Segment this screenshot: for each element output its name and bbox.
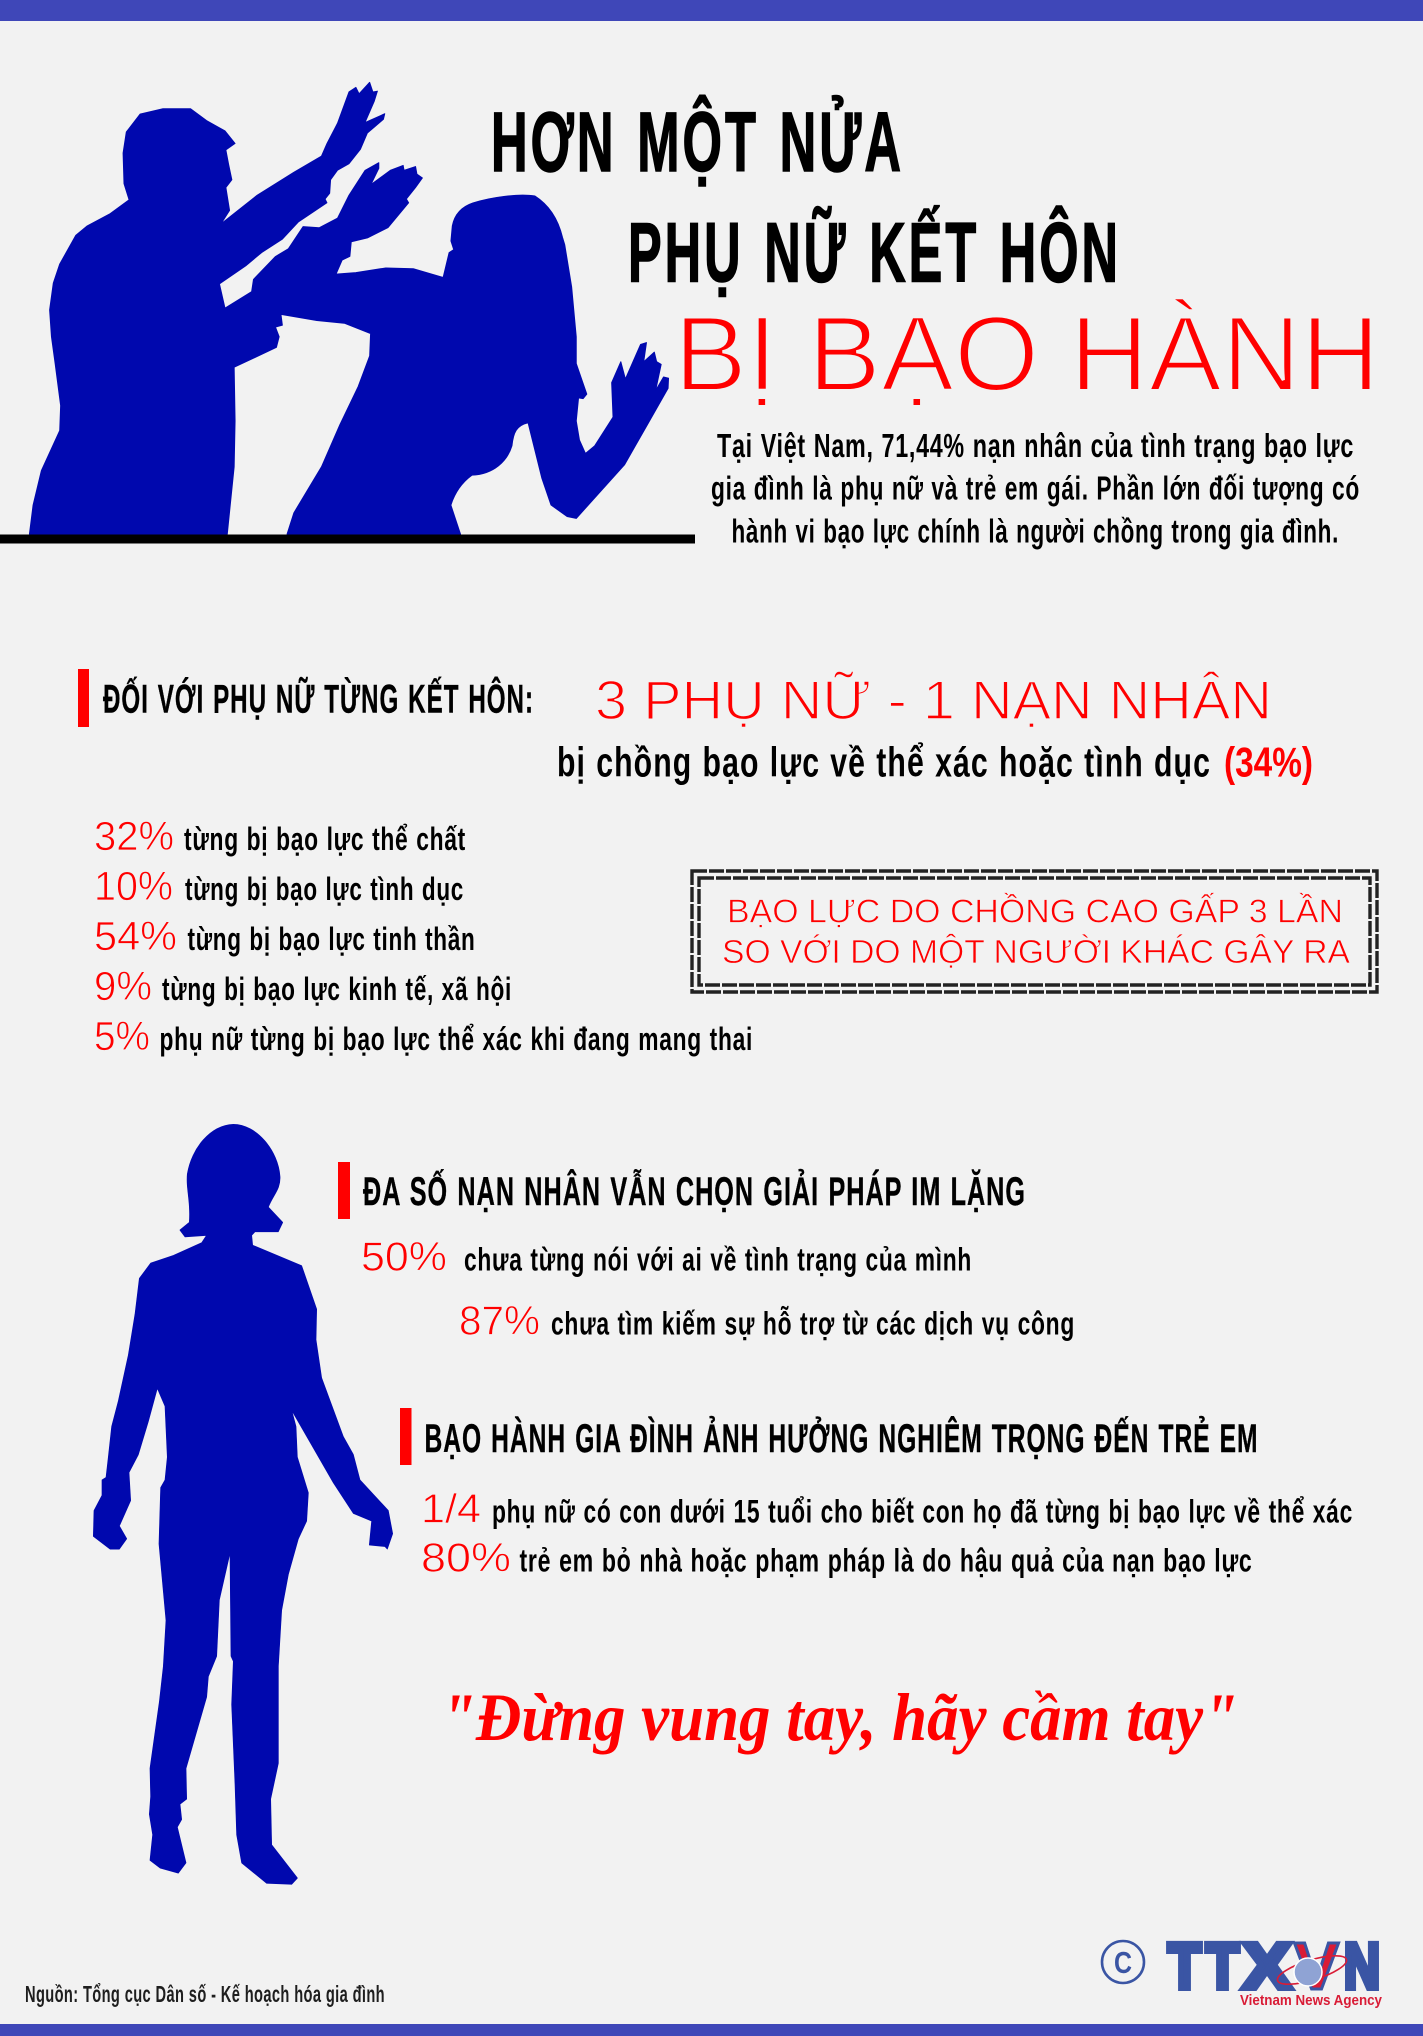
stat: 32%: từng bị bạo lực thể chất	[184, 821, 466, 857]
stat: 32%: 32%	[94, 813, 174, 859]
title: BỊ BẠO HÀNH	[674, 294, 1380, 414]
stat: 54%: 54%	[94, 913, 177, 959]
logo: TTXVN	[1102, 1929, 1383, 2009]
section marker	[78, 669, 89, 727]
callout: dashed box	[692, 871, 1377, 992]
logo wordmark: N	[1344, 1930, 1380, 2002]
slogan: "Đừng vung tay, hãy cầm tay"	[441, 1679, 1238, 1755]
logo wordmark: T	[1168, 1930, 1201, 2002]
stat: 10%: từng bị bạo lực tình dục	[185, 871, 464, 907]
stat: 5%	[94, 1013, 753, 1059]
stat: 9%: 9%	[94, 963, 152, 1009]
illustration: standing woman silhouette	[93, 1124, 393, 1884]
stat: 32%	[94, 813, 466, 859]
icon: copyright: C	[1114, 1945, 1132, 1980]
section marker	[338, 1162, 350, 1219]
logo wordmark	[1168, 1929, 1380, 2004]
logo tagline: Vietnam News Agency	[1240, 1992, 1383, 2009]
callout: dashed box: SO VỚI DO MỘT NGƯỜI KHÁC GÂY RA	[722, 933, 1350, 970]
icon: copyright	[1102, 1941, 1144, 1983]
stat: 50%: chưa từng nói với ai về tình trạng của mình	[464, 1242, 972, 1278]
logo wordmark: V	[1294, 1929, 1339, 2004]
section heading: ĐA SỐ NẠN NHÂN VẪN CHỌN GIẢI PHÁP IM LẶNG	[363, 1168, 1026, 1214]
stat: 9%	[94, 963, 512, 1009]
logo wordmark: T	[1206, 1930, 1239, 2002]
stat: 87%: 87%	[459, 1298, 540, 1344]
logo wordmark: X	[1243, 1930, 1291, 2002]
section heading: ĐỐI VỚI PHỤ NỮ TỪNG KẾT HÔN:	[103, 676, 534, 722]
headline stat: 3 PHỤ NỮ - 1 NẠN NHÂN	[595, 669, 1272, 731]
stat: 50%	[361, 1234, 972, 1280]
stat: 34%: (34%)	[1224, 738, 1313, 786]
icon: globe	[1275, 1950, 1349, 1990]
title	[491, 95, 1380, 414]
stat: 50%: 50%	[361, 1234, 447, 1280]
stat: 54%: từng bị bạo lực tinh thần	[188, 921, 476, 957]
stat: 1/4	[421, 1486, 1353, 1532]
section: silence	[338, 1162, 1075, 1344]
list of violence types	[94, 813, 753, 1059]
stat: 54%	[94, 913, 476, 959]
section: married women	[78, 669, 1313, 786]
intro paragraph	[711, 427, 1360, 550]
stat: 5%: phụ nữ từng bị bạo lực thể xác khi đang mang thai	[160, 1021, 753, 1057]
source: Nguồn: Tổng cục Dân số - Kế hoạch hóa gia đình	[25, 1981, 385, 2007]
illustration: man attacking woman silhouette	[0, 82, 695, 543]
stat: 5%: 5%	[94, 1013, 150, 1059]
stat: 80%: 80%	[421, 1534, 511, 1580]
title: HƠN MỘT NỬA	[491, 95, 904, 189]
stat: 10%: 10%	[94, 863, 173, 909]
stat: 87%	[459, 1298, 1075, 1344]
stat: 10%	[94, 863, 464, 909]
section marker	[400, 1408, 412, 1465]
stat: 9%: từng bị bạo lực kinh tế, xã hội	[162, 971, 512, 1007]
stat: 87%: chưa tìm kiếm sự hỗ trợ từ các dịch vụ công	[551, 1306, 1075, 1342]
top band	[0, 0, 1423, 21]
callout: dashed box: BẠO LỰC DO CHỒNG CAO GẤP 3 LẦN	[727, 892, 1343, 930]
section: children	[400, 1408, 1353, 1580]
stat: 80%	[421, 1534, 1252, 1580]
bottom band	[0, 2024, 1423, 2036]
stat: 1/4: 1/4	[421, 1486, 481, 1532]
